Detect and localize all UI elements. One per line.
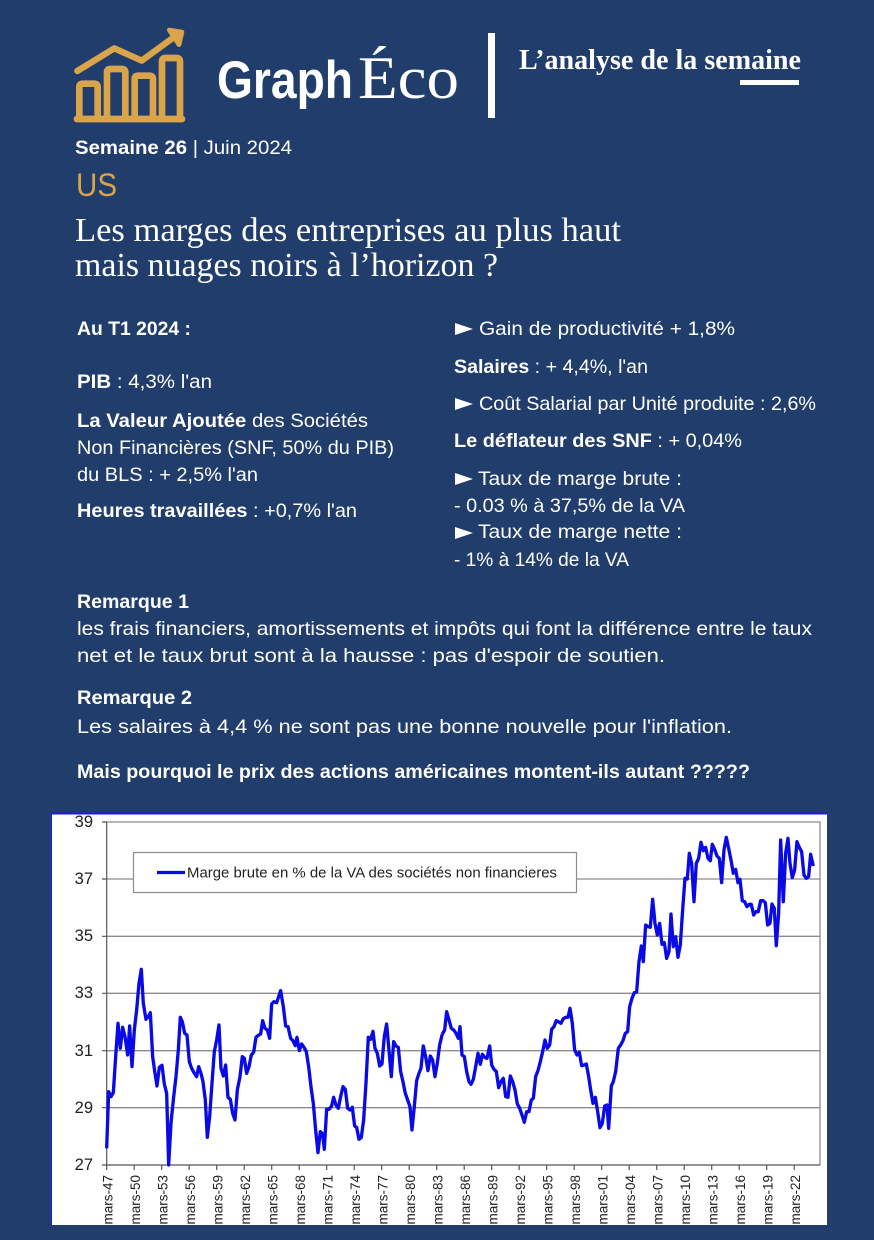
x axis labels: mars-83: [430, 1175, 446, 1225]
text block: right column figures: Taux de marge brute :: [478, 468, 682, 490]
y axis labels: 37: [75, 870, 93, 888]
y axis labels: 39: [75, 813, 93, 831]
x axis labels: mars-89: [486, 1175, 500, 1225]
y axis labels: 27: [75, 1156, 93, 1174]
x axis labels: mars-59: [210, 1175, 226, 1225]
panel: line chart: [51, 812, 827, 1225]
heading: L'analyse de la semaine: L’analyse de la semaine: [519, 44, 801, 76]
x axis labels: mars-86: [458, 1175, 473, 1225]
text block: left column figures: du BLS : + 2,5% l'an: [77, 464, 258, 486]
title: [75, 212, 622, 284]
text block: right column figures: [454, 318, 816, 571]
x axis labels: mars-95: [540, 1175, 556, 1225]
text block: remarque 1: net et le taux brut sont à la hausse : pas d'espoir de soutien.: [77, 645, 665, 667]
icon: GraphÉco logo with bars and rising arrow: [77, 30, 182, 119]
x axis labels: mars-04: [623, 1175, 638, 1225]
x axis labels: mars-77: [376, 1175, 390, 1225]
x axis labels: mars-68: [293, 1175, 308, 1225]
x axis labels: mars-47: [100, 1175, 116, 1225]
logo wordmark: Éco: [358, 45, 459, 111]
x axis labels: [100, 1175, 803, 1225]
text block: remarque 1: [77, 591, 812, 667]
y axis labels: 29: [75, 1099, 93, 1117]
logo wordmark: Graph: [217, 51, 353, 110]
x axis labels: mars-80: [403, 1175, 418, 1225]
data line: marge brute: [107, 837, 813, 1165]
text block: right column figures: - 0.03 % à 37,5% de la VA: [454, 495, 685, 517]
text block: remarque 2: [77, 687, 732, 738]
x axis labels: mars-56: [183, 1175, 198, 1225]
x axis labels: mars-16: [733, 1175, 748, 1225]
text block: remarque 1: Remarque 1: [77, 591, 189, 613]
text block: remarque 2: Remarque 2: [77, 687, 192, 709]
x axis labels: mars-53: [156, 1175, 170, 1225]
text block: left column figures: Au T1 2024 :: [77, 318, 191, 340]
x axis labels: mars-62: [238, 1175, 253, 1225]
text block: right column figures: Salaires : + 4,4%, l'an: [454, 356, 648, 378]
x axis labels: mars-10: [678, 1175, 693, 1225]
issue date: Semaine 26 | Juin 2024: [75, 137, 292, 159]
title: mais nuages noirs à l’horizon ?: [75, 247, 498, 284]
x axis labels: mars-74: [348, 1175, 363, 1225]
text block: right column figures: Le déflateur des SNF : + 0,04%: [454, 430, 742, 452]
text block: left column figures: Non Financières (SNF, 50% du PIB): [77, 437, 394, 459]
x axis labels: mars-07: [650, 1175, 666, 1225]
y axis labels: 35: [75, 927, 93, 945]
chart legend: [134, 852, 576, 892]
x axis labels: mars-19: [760, 1175, 776, 1225]
region label: US: [76, 167, 117, 203]
x axis labels: mars-98: [568, 1175, 583, 1225]
y axis labels: [75, 813, 93, 1174]
text block: left column figures: Heures travaillées : +0,7% l'an: [77, 500, 357, 522]
y axis labels: 31: [75, 1042, 93, 1060]
text block: left column figures: La Valeur Ajoutée des Sociétés: [77, 410, 368, 432]
title: Les marges des entreprises au plus haut: [75, 212, 622, 249]
x axis labels: mars-65: [266, 1175, 280, 1225]
text block: remarque 1: les frais financiers, amortissements et impôts qui font la différence entre le taux: [77, 618, 812, 640]
chart legend: Marge brute en % de la VA des sociétés non financieres: [187, 866, 557, 882]
text block: left column figures: PIB : 4,3% l'an: [77, 371, 212, 393]
x axis labels: mars-01: [596, 1175, 610, 1225]
text block: remarque 2: Les salaires à 4,4 % ne sont pas une bonne nouvelle pour l'inflation.: [77, 716, 732, 738]
closing question: Mais pourquoi le prix des actions américaines montent-ils autant ?????: [77, 761, 750, 783]
text block: right column figures: Taux de marge nette :: [478, 521, 682, 543]
text block: right column figures: - 1% à 14% de la VA: [454, 549, 629, 571]
text block: left column figures: [77, 318, 394, 522]
x axis labels: mars-92: [513, 1175, 528, 1225]
x axis labels: mars-71: [320, 1175, 336, 1225]
text block: right column figures: Coût Salarial par Unité produite : 2,6%: [479, 393, 816, 415]
y axis labels: 33: [75, 984, 93, 1002]
header divider: [488, 33, 495, 118]
x axis labels: mars-50: [128, 1175, 143, 1225]
text block: right column figures: Gain de productivité + 1,8%: [479, 318, 735, 340]
x axis labels: mars-22: [788, 1175, 803, 1225]
logo wordmark: [217, 45, 459, 111]
x axis labels: mars-13: [706, 1175, 720, 1225]
